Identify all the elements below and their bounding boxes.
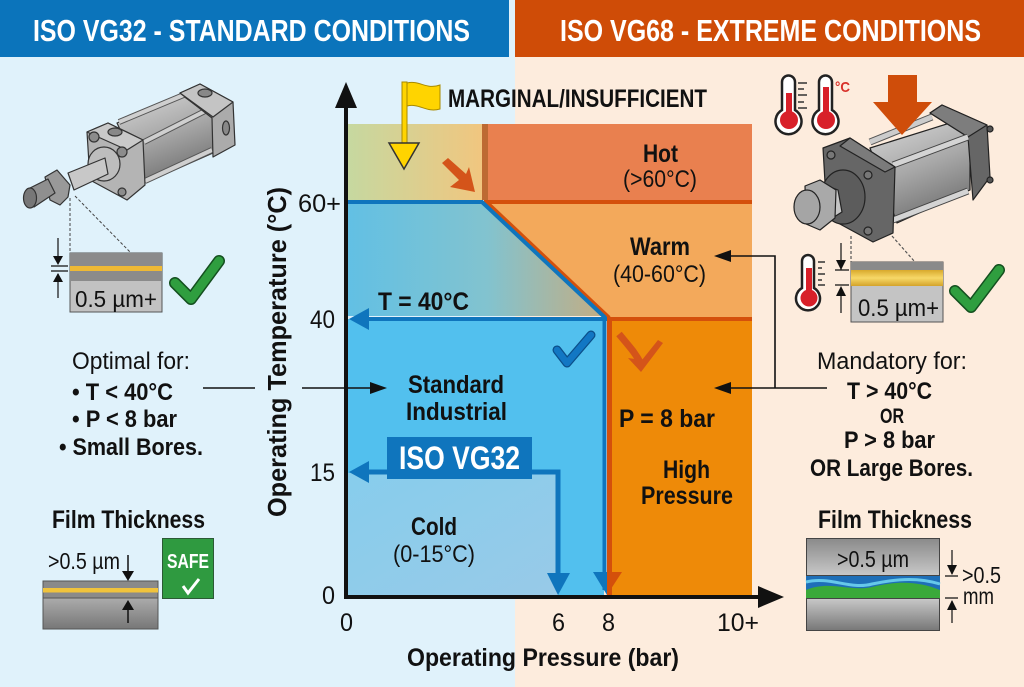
region: high pressure: P = 8 bar	[619, 405, 715, 433]
region: hot: Hot	[643, 140, 679, 168]
text: mandatory for: Mandatory for:	[817, 348, 967, 375]
film thickness right	[806, 506, 1001, 630]
boundary lines: blue VG32 limit	[348, 202, 604, 590]
region: warm: (40-60°C)	[613, 261, 706, 288]
barrel	[870, 123, 970, 223]
piston rod	[68, 158, 108, 190]
rear tie rod	[870, 117, 932, 142]
text: optimal for	[59, 348, 203, 461]
flag: marginal/insufficient	[389, 82, 707, 169]
region: high pressure	[608, 319, 752, 596]
y axis title: Operating Temperature (°C)	[262, 187, 292, 517]
film thickness right: Film Thickness	[818, 506, 972, 534]
label: ISO VG32 with arrows: ISO VG32	[399, 440, 520, 476]
text: optimal for: Optimal for:	[72, 348, 190, 375]
rod and nut	[825, 185, 842, 222]
film detail left top	[51, 196, 162, 312]
text: optimal for: • P < 8 bar	[72, 406, 177, 433]
icon: thermometers and celsius	[776, 76, 850, 134]
boundary lines: orange VG68 limit	[484, 124, 752, 596]
region: cold: Cold	[411, 513, 457, 541]
region: marginal	[348, 124, 483, 202]
arrow: optimal to standard	[203, 382, 387, 394]
nut and thread	[45, 170, 70, 205]
icon: green check left	[175, 261, 219, 299]
icon: thermometer 1	[776, 76, 807, 134]
chart: pressure temperature regions	[348, 124, 752, 596]
film thickness right: >0.5	[962, 562, 1001, 588]
icon: green check right	[955, 270, 999, 307]
text: mandatory for	[810, 348, 973, 482]
region: warm	[488, 204, 752, 318]
x axis ticks: 0	[340, 609, 353, 637]
x axis ticks: 10+	[717, 609, 759, 637]
film thickness right: mm	[963, 583, 994, 609]
region: transitional blue	[348, 203, 602, 316]
region: standard industrial: Industrial	[406, 398, 507, 426]
film thickness left: Film Thickness	[52, 506, 205, 534]
region: warm: Warm	[630, 233, 690, 261]
y axis ticks: 40	[310, 306, 335, 334]
film thickness left	[43, 506, 205, 629]
film detail left top: 0.5 µm+	[75, 286, 157, 312]
background: right side	[515, 0, 1024, 687]
icon: small pneumatic cylinder	[24, 84, 235, 208]
cylinder body	[117, 95, 213, 183]
icon: blue check	[557, 335, 591, 363]
film detail right top	[835, 236, 943, 322]
badge: safe: SAFE	[167, 551, 209, 573]
y axis ticks: 60+	[298, 190, 341, 218]
region: hot	[484, 124, 752, 204]
flag: marginal/insufficient: MARGINAL/INSUFFICIENT	[448, 85, 707, 113]
icon: downward force arrow	[873, 75, 932, 135]
icon: orange chevron arrow	[619, 334, 663, 372]
boss	[821, 170, 865, 224]
icon: thermometer 2: °C	[835, 79, 850, 96]
rear plate	[930, 105, 990, 200]
icon: thermometer 3	[796, 255, 825, 310]
front cap	[87, 123, 145, 200]
region: standard industrial	[348, 319, 604, 596]
arrows: mandatory to warm and high pressure	[714, 250, 827, 394]
region: standard industrial: Standard	[408, 371, 504, 399]
header: ISO VG68 extreme conditions	[515, 0, 1024, 57]
x axis ticks	[340, 609, 759, 637]
film thickness right: >0.5 µm	[837, 546, 909, 572]
region: high pressure: Pressure	[641, 482, 733, 510]
region: high pressure: High	[663, 456, 710, 484]
text: optimal for: • Small Bores.	[59, 434, 203, 461]
region: cold	[348, 473, 558, 596]
y axis ticks: 0	[322, 582, 335, 610]
x axis ticks: 6	[552, 609, 565, 637]
x axis title: Operating Pressure (bar)	[407, 644, 679, 672]
header: ISO VG32 standard conditions	[0, 0, 509, 57]
text: mandatory for: P > 8 bar	[844, 427, 935, 454]
icon: orange arrow marginal	[442, 158, 475, 192]
rear cap	[180, 84, 235, 157]
x axis ticks: 8	[602, 609, 615, 637]
arrow: T = 40°C	[349, 288, 607, 330]
y axis ticks	[298, 190, 341, 610]
arrowheads at 8 bar	[593, 572, 622, 595]
arrow: T = 40°C: T = 40°C	[378, 288, 469, 316]
header: ISO VG32 standard conditions: ISO VG32 - STANDARD CONDITIONS	[33, 13, 470, 48]
text: mandatory for: OR Large Bores.	[810, 455, 973, 482]
text: mandatory for: OR	[880, 405, 904, 428]
region: hot: (>60°C)	[623, 166, 697, 193]
front plate	[823, 138, 895, 242]
film thickness left: >0.5 µm	[48, 548, 120, 574]
axes	[335, 82, 784, 608]
y axis ticks: 15	[310, 459, 335, 487]
background: left side	[0, 0, 515, 687]
text: mandatory for: T > 40°C	[847, 378, 932, 405]
icon: large hydraulic cylinder	[794, 105, 993, 242]
film detail right top: 0.5 µm+	[858, 295, 939, 322]
tie rods	[893, 137, 968, 165]
text: optimal for: • T < 40°C	[72, 379, 173, 406]
region: cold: (0-15°C)	[393, 541, 475, 568]
badge: safe	[162, 538, 214, 598]
label: ISO VG32 with arrows	[349, 437, 570, 595]
